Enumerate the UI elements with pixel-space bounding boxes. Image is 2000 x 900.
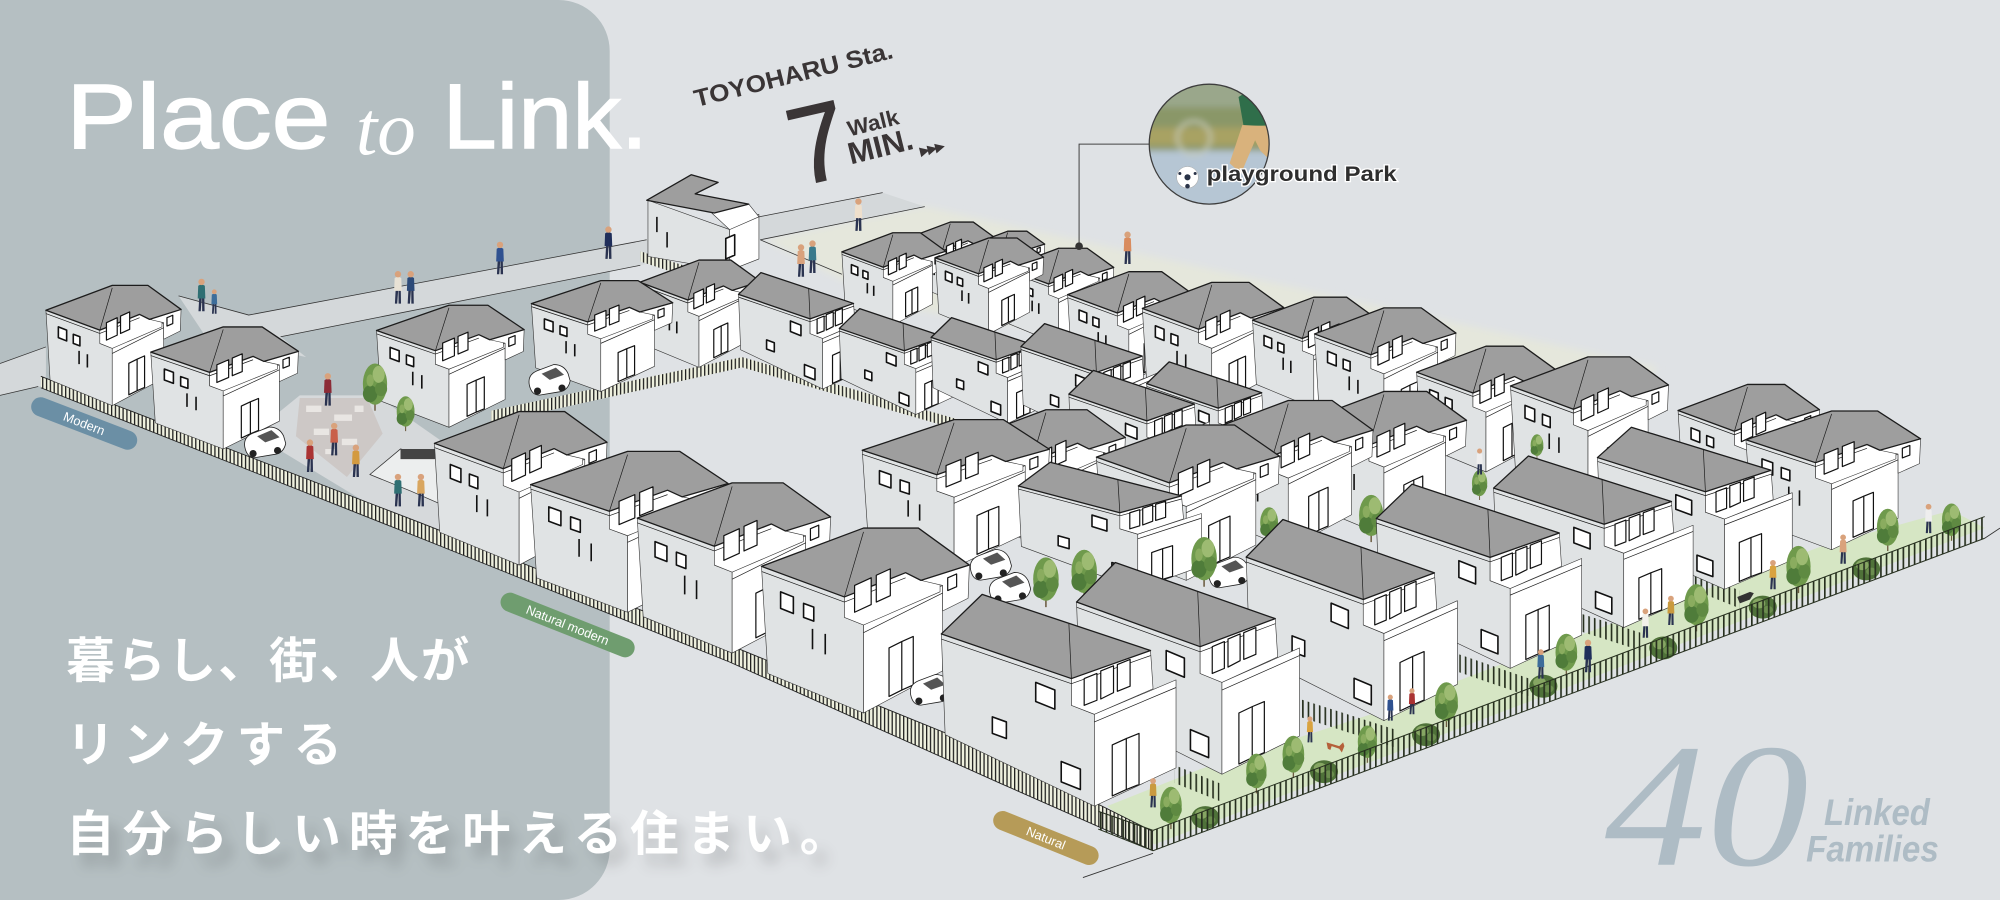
- tagline: リンクする: [66, 718, 342, 772]
- station walk badge: TOYOHARU Sta.: [691, 37, 896, 113]
- station walk badge: 7: [776, 76, 860, 209]
- 40 linked families: Families: [1806, 829, 1939, 870]
- house: upper left: [46, 285, 181, 406]
- entrance paved court: [253, 395, 440, 536]
- park photo circle: [1148, 84, 1270, 205]
- title: Link.: [443, 66, 648, 168]
- tagline: 暮らし、街、人が: [66, 634, 469, 688]
- 40 linked families: [1605, 709, 1939, 900]
- label pill: Natural: Natural: [1024, 823, 1068, 853]
- plot divider fences: [1175, 570, 1740, 801]
- house: front of strip: [531, 281, 673, 392]
- house block: back rows: [640, 175, 1819, 589]
- trees among houses: [363, 363, 1543, 607]
- house: by entrance: [151, 327, 298, 449]
- house: court side: [377, 305, 524, 427]
- soccer ball icon: [1177, 166, 1198, 189]
- station walk badge: Walk: [845, 104, 902, 141]
- house block: front row: [941, 411, 1921, 806]
- label pill: Natural modern: [498, 590, 638, 660]
- tagline: [66, 634, 848, 862]
- title: to: [356, 86, 416, 171]
- garden trees and shrubs: [1160, 504, 1961, 829]
- people: [198, 198, 1932, 807]
- tagline: 自分らしい時を叶える住まい。: [66, 808, 848, 862]
- house top L-shape: [647, 175, 759, 270]
- label pill: Modern: [28, 394, 140, 453]
- label pill: Natural modern: Natural modern: [524, 602, 611, 648]
- title: Place: [66, 66, 330, 168]
- house row 1: [907, 222, 995, 300]
- cars: [245, 365, 1250, 705]
- title: [66, 66, 648, 171]
- station walk badge: MIN.: [844, 122, 917, 171]
- green fence: [1098, 517, 1985, 851]
- house block: entrance group: [46, 281, 673, 449]
- park callout leader line: [1075, 144, 1151, 250]
- 40 linked families: Linked: [1824, 792, 1931, 833]
- label pill: Modern: Modern: [61, 409, 107, 438]
- house block: left diagonal row: [434, 412, 969, 713]
- park label: playground Park: [1207, 163, 1397, 186]
- dogs: [1327, 592, 1754, 753]
- house row 2: [640, 260, 760, 367]
- 40 linked families: 40: [1605, 709, 1809, 900]
- left panel: [0, 0, 610, 900]
- label pill: Natural: [990, 808, 1102, 868]
- back fence: [491, 251, 963, 431]
- roads: [0, 193, 2000, 878]
- left fence: [41, 376, 1153, 851]
- park ground strip: [765, 207, 1658, 383]
- lawn: [1107, 510, 1985, 844]
- station walk badge: [691, 37, 947, 209]
- station walk badge: ▶▶▶: [918, 139, 947, 159]
